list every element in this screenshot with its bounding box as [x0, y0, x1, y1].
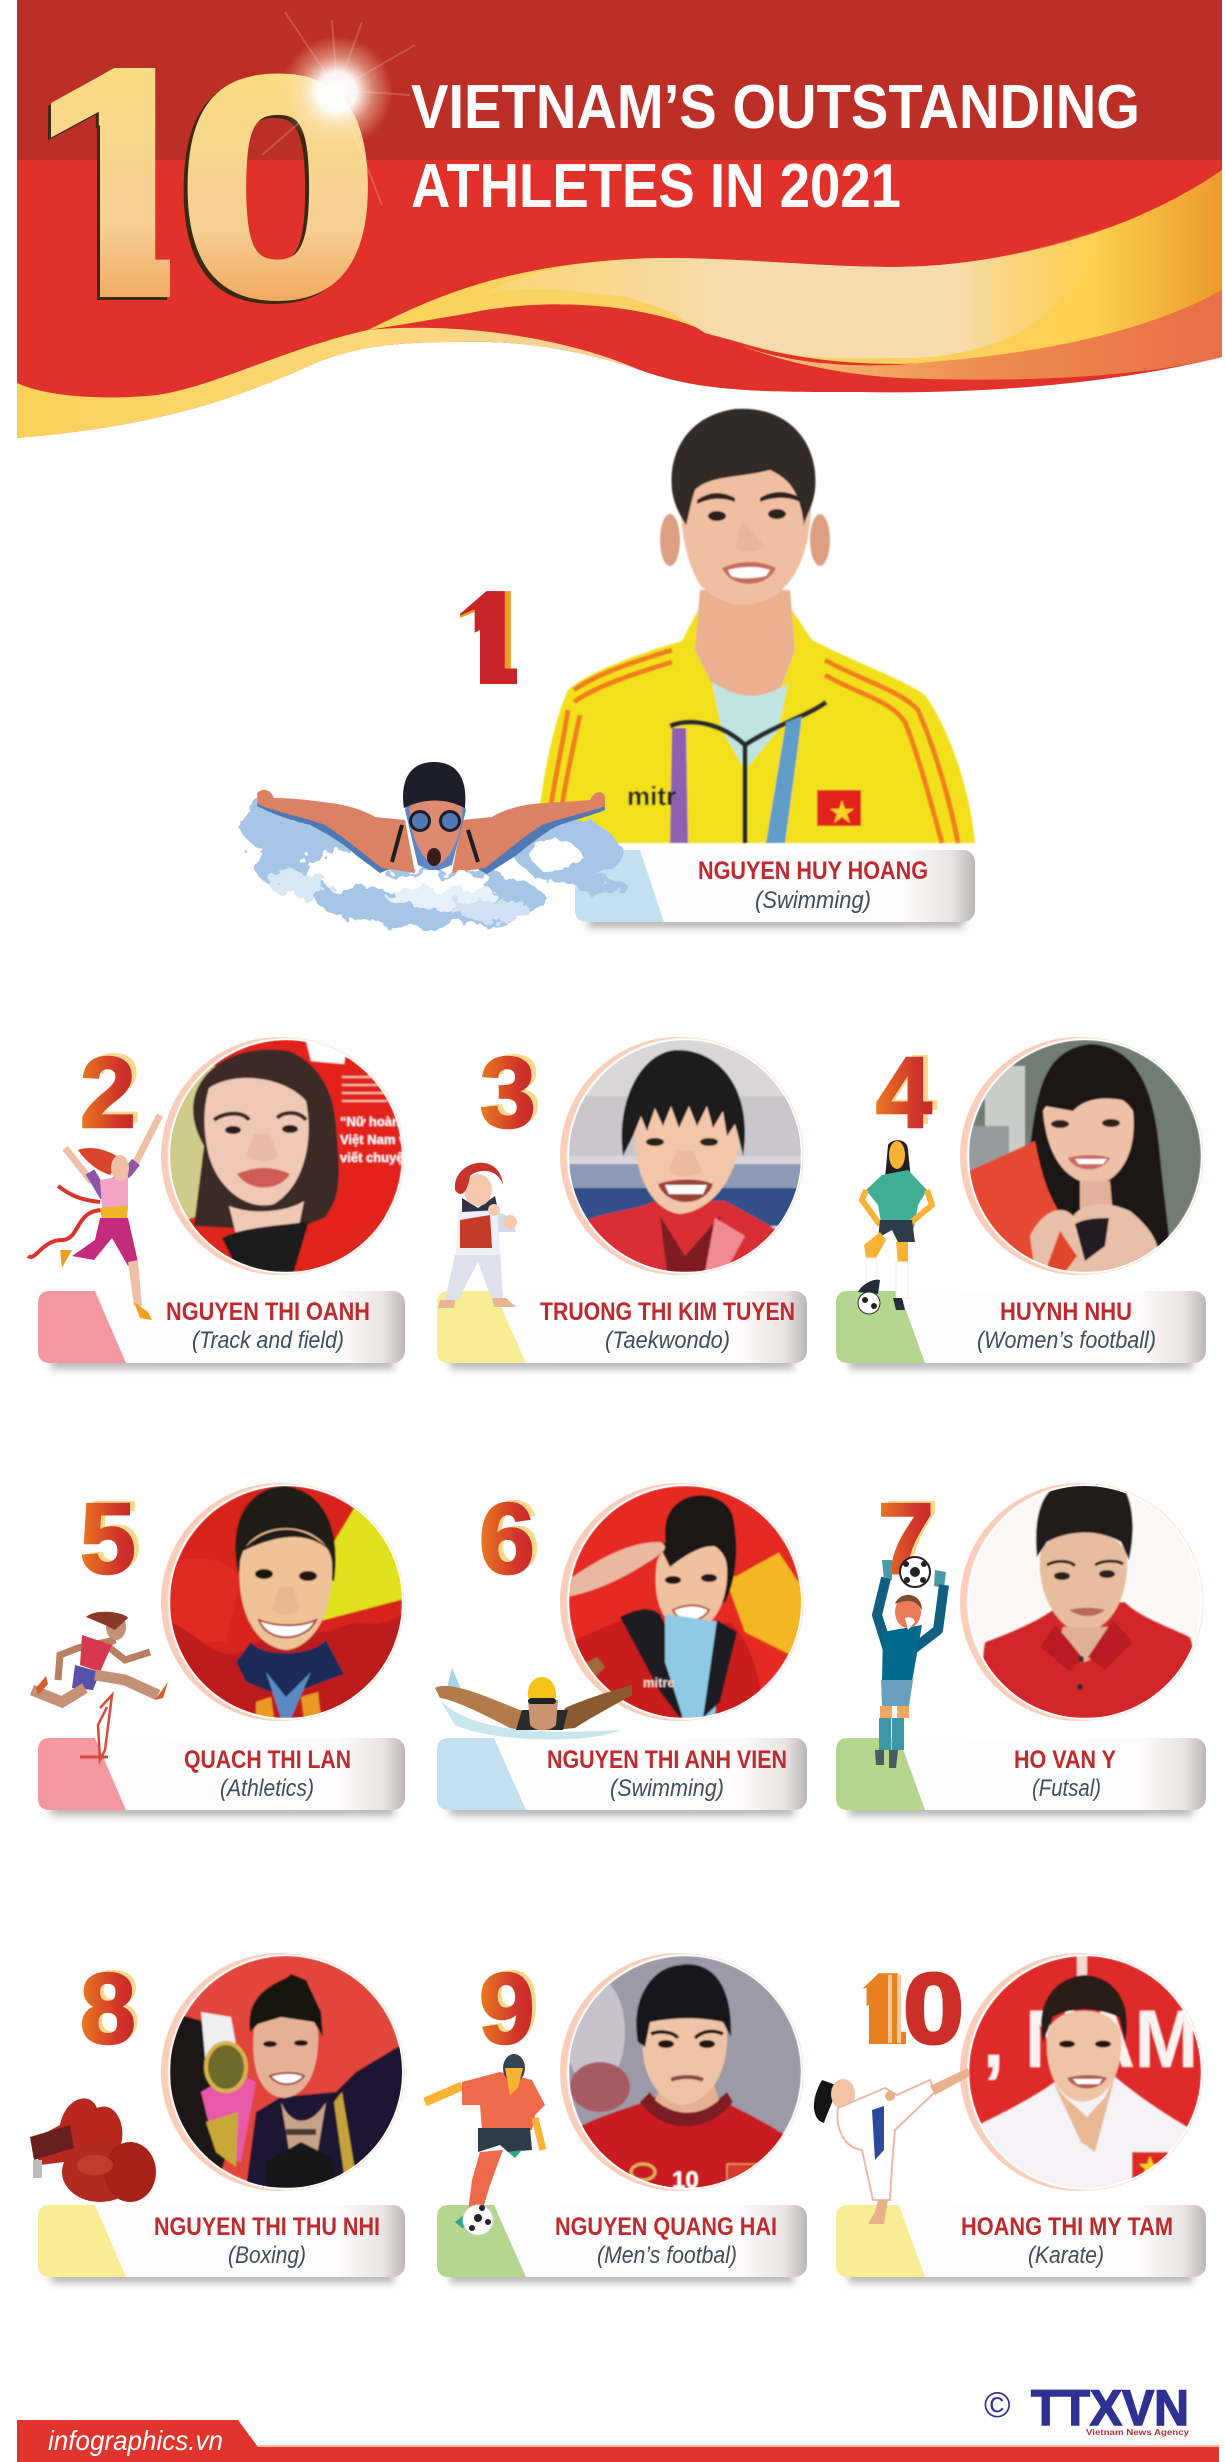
- mitre logo: mitr: [627, 781, 676, 811]
- portrait 9: Nguyen Quang Hai: 10: [672, 2167, 699, 2194]
- nose: [735, 520, 765, 552]
- label bar 3: (Taekwondo): [605, 1327, 730, 1354]
- copyright mark: ©: [984, 2384, 1011, 2425]
- swimsuit straps: [392, 825, 478, 862]
- label bar 9: (Men’s footbal): [597, 2242, 737, 2269]
- icon: karate kick: [814, 2068, 970, 2224]
- number 1: 1: [430, 564, 540, 711]
- label bar 9: NGUYEN QUANG HAI: [555, 2213, 777, 2241]
- arms: [257, 790, 415, 873]
- athlete 6 entry: [435, 1480, 807, 1816]
- number 6: 6: [485, 1480, 541, 1592]
- label bar 10: [836, 2205, 1206, 2283]
- flag patch: [817, 790, 861, 826]
- label bar 4: HUYNH NHU: [1000, 1298, 1132, 1326]
- mouth: [427, 848, 441, 866]
- number 1: 1: [436, 564, 546, 711]
- portrait ring 6: [560, 1483, 803, 1721]
- number 8: 8: [85, 1950, 141, 2062]
- athlete 5 entry: [32, 1480, 411, 1816]
- portrait 3: Truong Thi Kim Tuyen: [569, 1040, 801, 1272]
- athlete 9 entry: [425, 1950, 807, 2283]
- label bar 4: (Women’s football): [977, 1327, 1156, 1354]
- portrait 9: Nguyen Quang Hai: [565, 1956, 801, 2194]
- number 5: 5: [80, 1483, 136, 1595]
- athlete 2 entry: [28, 1033, 412, 1369]
- athlete 1 portrait: [536, 409, 975, 843]
- icon: butterfly swimmer: [240, 762, 626, 926]
- front splash: [370, 873, 494, 891]
- footer bar: [17, 2420, 1219, 2462]
- portrait ring 10: [960, 1953, 1203, 2191]
- label bar 8: [38, 2205, 405, 2283]
- pale ribbon highlight: [486, 225, 1110, 358]
- icon: hurdler: [32, 1612, 168, 1760]
- portrait 2: Nguyen Thi Oanh: Việt Nam v: [340, 1132, 407, 1147]
- label bar 5: (Athletics): [220, 1775, 314, 1802]
- icon: taekwondo fighter: [438, 1163, 517, 1308]
- icon: female footballer: [858, 1140, 932, 1314]
- number 7: 7: [878, 1483, 934, 1595]
- goggles: [410, 812, 430, 830]
- agency wordmark: TTXVN: [1031, 2380, 1189, 2436]
- label bar 6: (Swimming): [610, 1775, 724, 1802]
- label bar 3: [437, 1291, 807, 1369]
- label bar 1: NGUYEN HUY HOANG: [698, 857, 928, 885]
- portrait 8: Nguyen Thi Thu Nhi: [170, 1956, 406, 2188]
- eyes and brows: [697, 492, 800, 521]
- number 2: 2: [80, 1037, 136, 1149]
- big number 10: 0: [174, 16, 374, 363]
- title: ATHLETES IN 2021: [411, 152, 901, 221]
- agency name: Vietnam News Agency: [1086, 2428, 1190, 2437]
- hair: [672, 409, 815, 525]
- big number 10: 0: [178, 13, 378, 360]
- water splash: [240, 803, 626, 926]
- label bar 7: HO VAN Y: [1014, 1746, 1116, 1774]
- label bar 7: [836, 1738, 1206, 1816]
- big number 10: 1: [10, 3, 220, 368]
- athlete 3 entry: [437, 1034, 807, 1369]
- portrait ring 2: [161, 1037, 404, 1275]
- label bar 10: (Karate): [1028, 2242, 1104, 2269]
- label bar 2: (Track and field): [192, 1327, 344, 1354]
- face: [680, 450, 811, 605]
- lanyards: [670, 728, 688, 843]
- icon: male footballer: [425, 2054, 545, 2235]
- hood straps: [405, 800, 466, 872]
- label bar 9: [437, 2205, 807, 2283]
- smile: [722, 562, 776, 584]
- number 10: 1: [822, 1953, 933, 2065]
- portrait 2: Nguyen Thi Oanh: [170, 1040, 412, 1272]
- label bar 2: NGUYEN THI OANH: [166, 1298, 370, 1326]
- copyright logo: [984, 2380, 1190, 2437]
- big number 10: [48, 68, 368, 304]
- athlete 7 entry: [836, 1480, 1206, 1816]
- label bar 8: (Boxing): [228, 2242, 306, 2269]
- portrait 4: Huynh Nhu: [969, 1040, 1201, 1272]
- number 10: 0: [903, 1953, 964, 2065]
- label bar 6: NGUYEN THI ANH VIEN: [547, 1746, 787, 1774]
- label bar 6: [437, 1738, 807, 1816]
- number 2: 2: [86, 1033, 142, 1145]
- number 7: 7: [884, 1480, 940, 1592]
- title: [411, 73, 1140, 221]
- number 5: 5: [86, 1480, 142, 1592]
- head: [410, 794, 462, 866]
- portrait 6: Nguyen Thi Anh Vien: mitre: [643, 1675, 675, 1690]
- portrait ring 5: [161, 1483, 404, 1721]
- number 1: [460, 591, 517, 684]
- big number 10: 1: [13, 0, 223, 365]
- number 4: 4: [882, 1034, 938, 1146]
- portrait 2: Nguyen Thi Oanh: “Nữ hoàng: [340, 1114, 408, 1129]
- portrait 5: Quach Thi Lan: [170, 1486, 411, 1718]
- label bar 1: (Swimming): [755, 887, 871, 914]
- label bar 10: HOANG THI MY TAM: [961, 2213, 1173, 2241]
- swim cap: [403, 762, 466, 808]
- icon: swimmer with yellow cap: [435, 1668, 632, 1740]
- icon: goalkeeper with ball: [875, 1557, 946, 1768]
- jacket stripes: [546, 650, 958, 843]
- icon: runner at finish line: [28, 1115, 160, 1320]
- number 10: [862, 1972, 962, 2046]
- label bar 5: QUACH THI LAN: [184, 1746, 351, 1774]
- portrait ring 8: [161, 1953, 404, 2191]
- zip and collar: [670, 702, 826, 843]
- arm shadows: [257, 798, 392, 873]
- title: VIETNAM’S OUTSTANDING: [411, 73, 1140, 142]
- header banner: [10, 0, 1222, 438]
- orange ribbon: [740, 290, 1222, 380]
- label bar 5: [38, 1738, 405, 1816]
- portrait ring 4: [960, 1037, 1203, 1275]
- label bar 3: TRUONG THI KIM TUYEN: [540, 1298, 795, 1326]
- number 9: 9: [479, 1953, 535, 2065]
- portrait ring 3: [560, 1037, 803, 1275]
- banner dark red top band: [17, 0, 1222, 160]
- athlete 10 entry: [814, 1953, 1206, 2283]
- portrait 2: Nguyen Thi Oanh: viết chuyện: [340, 1150, 412, 1165]
- ears: [660, 514, 680, 566]
- left gold ribbon: [17, 328, 640, 438]
- icon: boxing gloves: [30, 2098, 156, 2202]
- athlete 4 entry: [836, 1034, 1206, 1369]
- label bar 8: NGUYEN THI THU NHI: [154, 2213, 380, 2241]
- label bar 2: [38, 1291, 405, 1369]
- portrait ring 9: [560, 1953, 803, 2191]
- jacket: [536, 610, 975, 843]
- number 9: 9: [484, 1950, 540, 2062]
- label bar 4: [836, 1291, 1206, 1369]
- portrait ring 7: [960, 1483, 1203, 1721]
- portrait 7: Ho Van Y: [982, 1486, 1194, 1718]
- sparkle: [262, 12, 415, 205]
- portrait 10: Hoang Thi My Tam: , NAM: [983, 1994, 1198, 2085]
- number 8: 8: [80, 1953, 136, 2065]
- label bar 1: [575, 850, 975, 928]
- athlete 8 entry: [30, 1950, 406, 2283]
- portrait 10: Hoang Thi My Tam: [969, 1956, 1201, 2188]
- portrait 6: Nguyen Thi Anh Vien: [565, 1486, 805, 1718]
- upper gold ribbon: [368, 170, 1222, 364]
- label bar 7: (Futsal): [1032, 1775, 1101, 1802]
- number 3: 3: [486, 1034, 542, 1146]
- number 6: 6: [479, 1483, 535, 1595]
- banner red background: [17, 0, 1222, 438]
- footer site name: infographics.vn: [48, 2425, 223, 2456]
- number 3: 3: [480, 1037, 536, 1149]
- neck and tee: [695, 590, 795, 740]
- number 4: 4: [876, 1037, 932, 1149]
